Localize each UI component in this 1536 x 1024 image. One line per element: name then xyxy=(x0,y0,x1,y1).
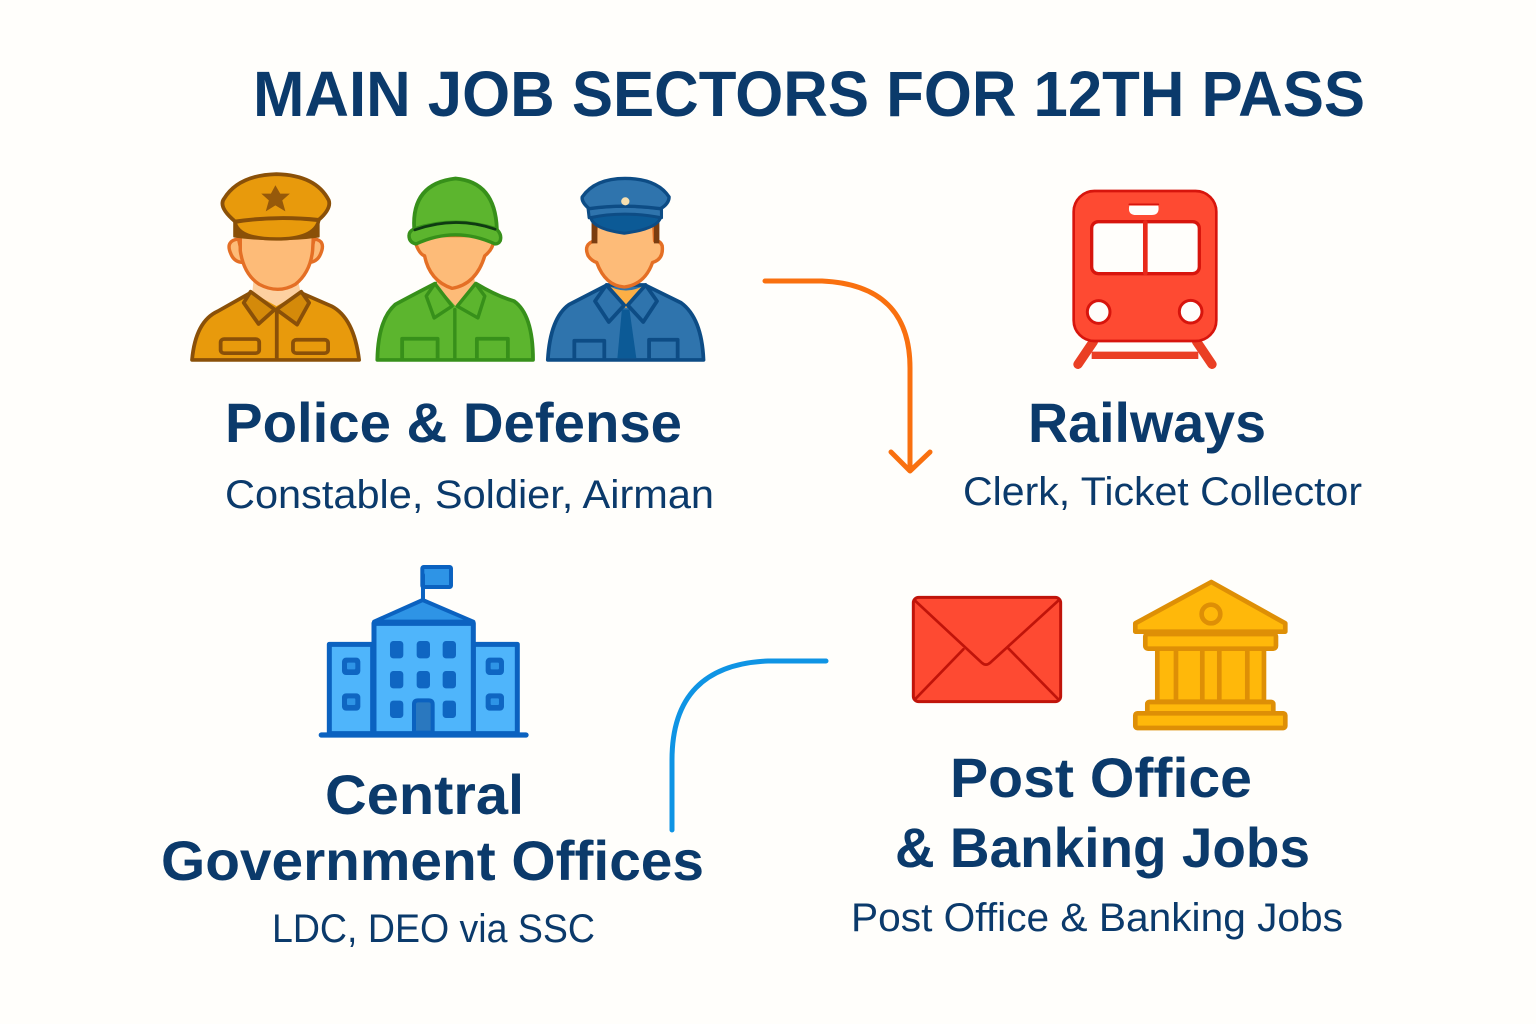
text: post office and banking roles: Post Office & Banking Jobs xyxy=(851,896,1343,940)
icon: bank building xyxy=(1135,582,1285,728)
text: railways roles: Clerk, Ticket Collector xyxy=(963,470,1362,514)
text: police and defense roles: Constable, Soldier, Airman xyxy=(225,473,714,517)
heading: railways: Railways xyxy=(1028,391,1266,454)
title: MAIN JOB SECTORS FOR 12TH PASS xyxy=(253,58,1365,130)
heading: central government offices: Central xyxy=(325,763,524,826)
icon: train xyxy=(1074,191,1216,364)
icon: envelope xyxy=(913,597,1061,702)
panel: central government offices xyxy=(161,567,704,951)
icon: airman with blue cap xyxy=(548,178,703,360)
panel: post office and banking jobs xyxy=(851,582,1343,940)
icon: soldier with green helmet xyxy=(377,178,533,360)
heading line two: government offices: Government Offices xyxy=(161,829,704,892)
heading: post office: Post Office xyxy=(950,746,1252,809)
panel: police and defense xyxy=(192,174,714,517)
heading: police and defense: Police & Defense xyxy=(225,391,682,454)
panel: railways xyxy=(963,191,1362,514)
arrow: blue curved connector xyxy=(672,661,826,830)
icon: police officer with star cap xyxy=(192,174,359,360)
text: government office roles: LDC, DEO via SSC xyxy=(272,907,595,951)
icon: government building xyxy=(319,567,529,738)
arrow: orange curved connector xyxy=(765,281,930,471)
heading line two: banking jobs: & Banking Jobs xyxy=(895,816,1310,879)
